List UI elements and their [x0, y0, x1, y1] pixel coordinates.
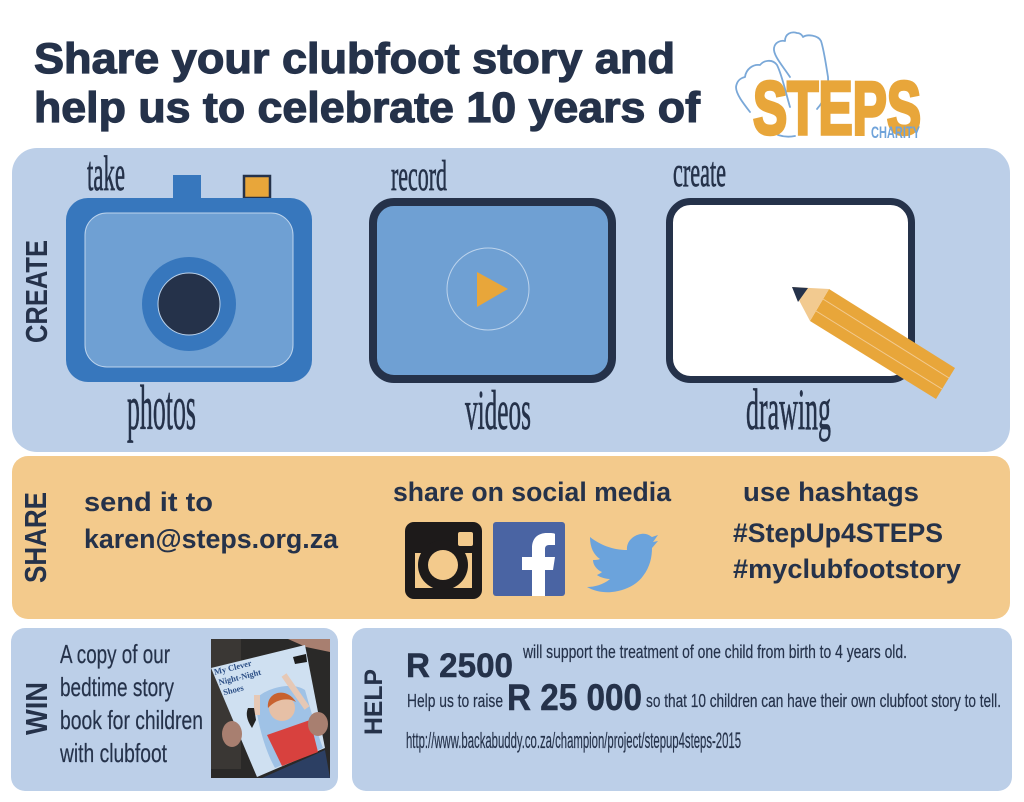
title: help us to celebrate 10 years of	[34, 84, 701, 132]
panel: create: videos	[465, 380, 531, 442]
label: record: record	[391, 153, 447, 200]
heading: use hashtags: use hashtags	[743, 477, 919, 507]
icon: camera	[66, 175, 312, 382]
icon: video player	[373, 202, 612, 379]
heading: help: HELP	[360, 669, 388, 735]
text: help us to raise: Help us to raise	[407, 691, 503, 711]
image: book held in hands	[211, 639, 330, 778]
text: book prize: A copy of our	[60, 639, 170, 669]
title	[34, 35, 701, 132]
book cover title	[213, 656, 265, 698]
text: book prize	[59, 639, 203, 768]
text: send it to: karen@steps.org.za	[84, 524, 339, 554]
logo: STEPS charity	[736, 32, 921, 150]
panel: win	[11, 628, 338, 791]
icon: facebook	[493, 522, 565, 596]
panel: create: take	[87, 145, 125, 201]
icon: feet outlines	[736, 32, 828, 137]
text: book prize: with clubfoot	[59, 738, 168, 768]
logo sub-label: CHARITY	[871, 123, 920, 142]
book cover title: My Clever	[213, 658, 253, 677]
panel: help	[352, 628, 1012, 791]
text: book prize: book for children	[60, 705, 203, 735]
text: send it to	[84, 487, 339, 554]
text: hashtags: #StepUp4STEPS	[733, 518, 943, 548]
heading: win: WIN	[19, 682, 54, 735]
panel: share	[12, 456, 1010, 619]
book cover title: Shoes	[222, 682, 245, 697]
text: send it to: send it to	[84, 487, 213, 517]
label: create: create	[673, 150, 726, 196]
title: Share your clubfoot story and	[34, 35, 675, 83]
icon: twitter	[587, 534, 658, 592]
text: book prize: bedtime story	[60, 672, 174, 702]
figure: R 2500: R 2500	[406, 647, 513, 685]
panel: create: photos	[127, 372, 196, 443]
heading: share on social media: share on social media	[393, 477, 672, 507]
figure: R 25 000: R 25 000	[507, 677, 642, 718]
logo wordmark: STEPS	[753, 66, 921, 150]
text: hashtags: #myclubfootstory	[733, 554, 961, 584]
panel: create	[12, 145, 1010, 452]
text: support: will support the treatment of one child from birth to 4 years old.	[522, 642, 907, 662]
panel: create: drawing	[746, 377, 831, 442]
icon: instagram	[405, 522, 482, 599]
text: hashtags	[733, 518, 961, 584]
book cover title: Night-Night	[217, 667, 262, 687]
heading: share: SHARE	[18, 492, 53, 583]
heading: create: CREATE	[19, 240, 54, 343]
icon: drawing board with pencil	[670, 202, 955, 399]
